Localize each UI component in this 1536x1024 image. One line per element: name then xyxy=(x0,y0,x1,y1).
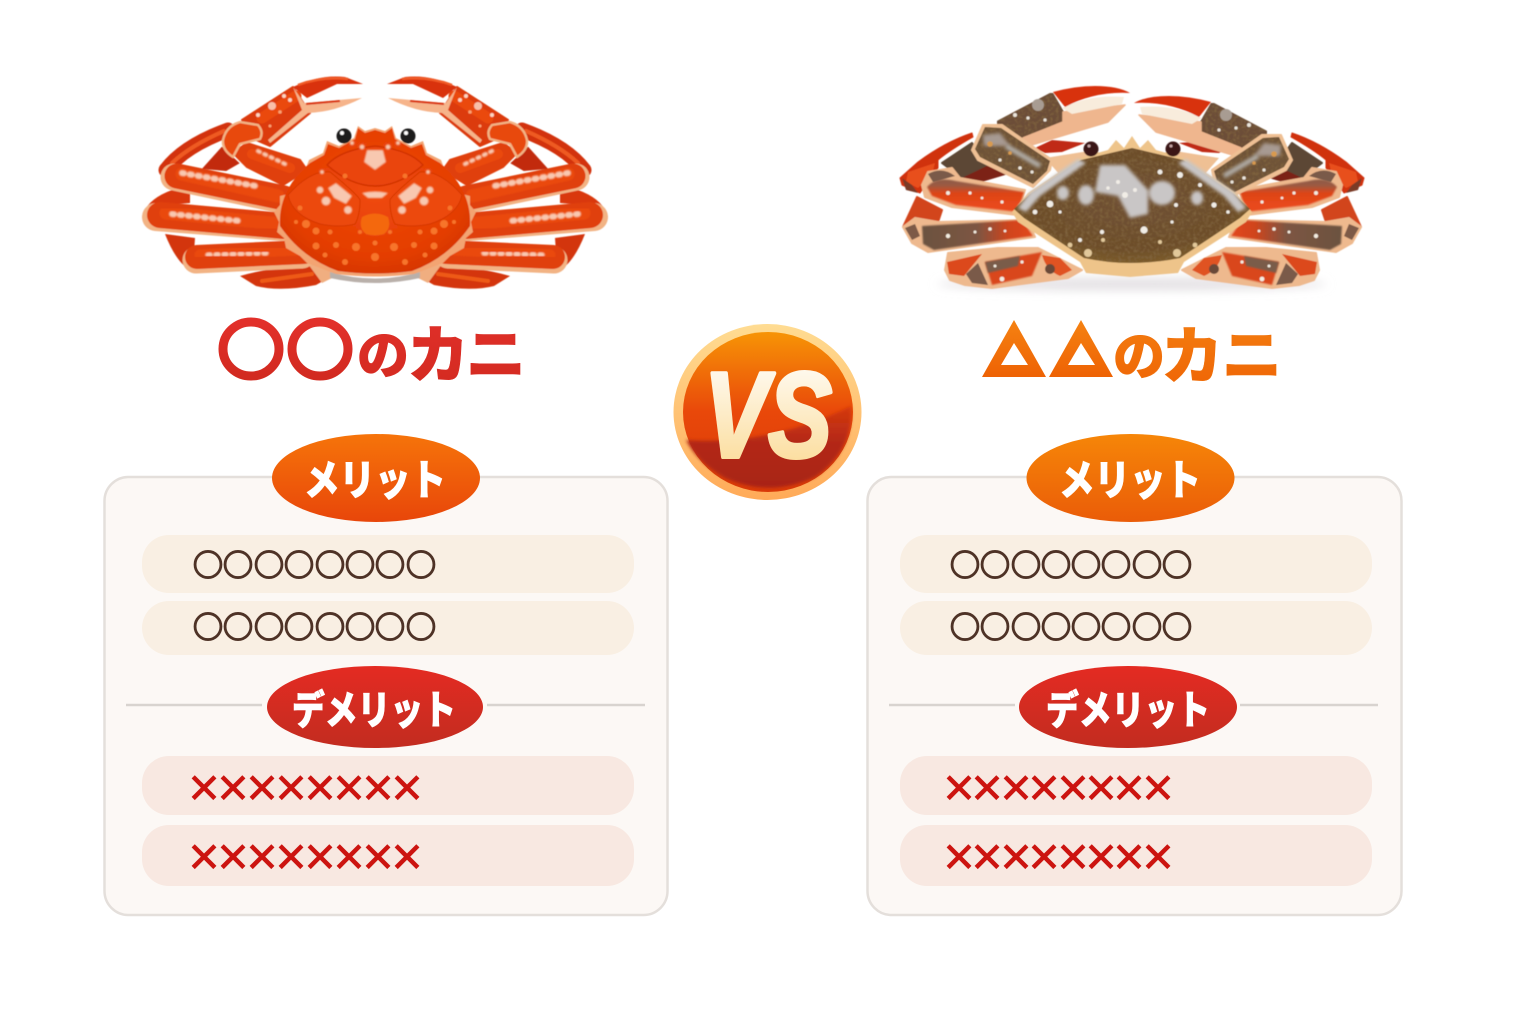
shell speckles xyxy=(316,141,434,214)
VS badge xyxy=(674,324,862,500)
eye left xyxy=(336,128,352,144)
title text: の xyxy=(1113,315,1165,390)
title text: ニ xyxy=(466,307,526,394)
title text: カ xyxy=(1161,306,1223,396)
demerit row 1: ×××××××× xyxy=(941,760,1176,812)
crab shell xyxy=(280,128,470,274)
VS text: VS xyxy=(704,347,832,483)
title triangles xyxy=(982,320,1113,377)
title: left crab xyxy=(223,305,526,395)
crab ground shadow xyxy=(937,278,1327,290)
demerit row 2 xyxy=(900,825,1372,886)
eye right xyxy=(400,128,416,144)
demerit row 2: ×××××××× xyxy=(186,829,425,881)
title text: の xyxy=(357,314,409,389)
demerit row 1 xyxy=(142,756,634,815)
merit badge: メリット xyxy=(1059,447,1201,508)
demerit row 2: ×××××××× xyxy=(941,829,1176,881)
merit row 2: ○○○○○○○○ xyxy=(950,603,1192,647)
merit badge: メリット xyxy=(304,447,446,508)
badge face xyxy=(683,332,853,492)
demerit badge: デメリット xyxy=(292,678,456,736)
illustration: brown crab xyxy=(900,86,1364,290)
badge ring xyxy=(674,324,862,500)
demerit badge xyxy=(1019,666,1237,748)
eye highlights xyxy=(1088,144,1172,148)
badge lower shade xyxy=(686,406,851,488)
shell lobes xyxy=(327,146,423,186)
demerit divider xyxy=(889,704,1378,706)
salt patches xyxy=(1018,159,1246,218)
crab shell xyxy=(1014,148,1250,263)
merit badge xyxy=(1026,434,1234,522)
title text: ニ xyxy=(1222,308,1282,395)
eye right xyxy=(1166,142,1180,156)
merit row 1 xyxy=(900,535,1372,593)
merit badge xyxy=(272,434,480,522)
demerit badge: デメリット xyxy=(1046,678,1210,736)
demerit divider xyxy=(126,704,645,706)
title: right crab xyxy=(982,306,1282,396)
merit row 1: ○○○○○○○○ xyxy=(193,541,436,585)
demerit row 1 xyxy=(900,756,1372,815)
eye highlights xyxy=(340,131,408,135)
panel: right crab xyxy=(868,434,1402,915)
crab shell underside xyxy=(330,272,420,283)
demerit badge xyxy=(267,666,483,748)
merit row 2 xyxy=(900,601,1372,655)
demerit row 1: ×××××××× xyxy=(186,760,425,812)
title circles xyxy=(223,322,348,376)
shell nose xyxy=(361,214,389,236)
panel frame xyxy=(868,477,1402,915)
shell speckles xyxy=(1033,170,1230,242)
panel frame xyxy=(104,477,668,915)
eye left xyxy=(1084,142,1098,156)
demerit row 2 xyxy=(142,825,634,886)
merit row 2 xyxy=(142,601,634,655)
merit row 1: ○○○○○○○○ xyxy=(950,541,1192,585)
panel: left crab xyxy=(104,434,668,915)
merit row 2: ○○○○○○○○ xyxy=(193,603,436,647)
merit row 1 xyxy=(142,535,634,593)
illustration: red crab xyxy=(144,76,606,289)
crab shell rim xyxy=(274,126,476,276)
title text: カ xyxy=(407,305,469,395)
crab shell rim xyxy=(1012,136,1252,277)
